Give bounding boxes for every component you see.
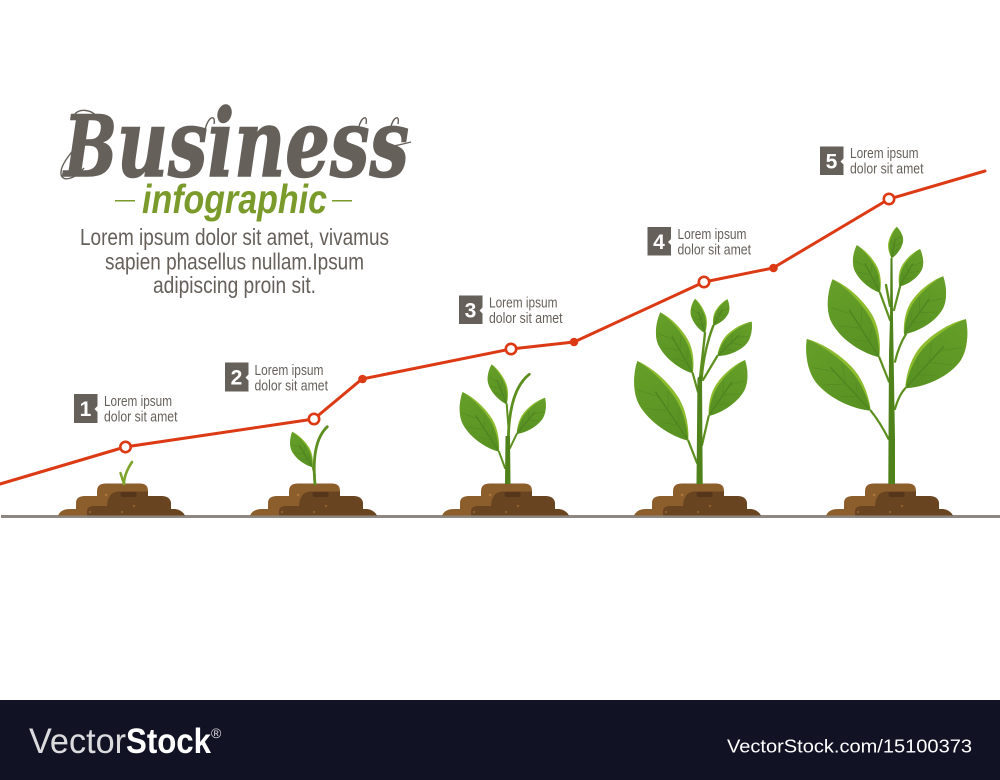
label 4: 4 bbox=[653, 231, 665, 254]
label 3: dolor sit amet bbox=[489, 311, 562, 327]
plant stage 5: mature plant bbox=[790, 226, 984, 484]
plant stage 3: young plant bbox=[448, 362, 554, 484]
plant stage 4: growing plant bbox=[619, 297, 760, 484]
label 4: Lorem ipsum bbox=[678, 227, 746, 243]
subtitle: infographic: infographic bbox=[142, 176, 327, 222]
intro paragraph bbox=[80, 224, 389, 298]
label 5: dolor sit amet bbox=[850, 162, 924, 178]
label 2: Lorem ipsum bbox=[254, 363, 324, 379]
label 4 bbox=[648, 227, 751, 258]
growth line chart bbox=[0, 171, 985, 484]
footer bar bbox=[0, 700, 1000, 780]
intro paragraph: sapien phasellus nullam.Ipsum bbox=[105, 248, 364, 274]
intro paragraph: Lorem ipsum dolor sit amet, vivamus bbox=[80, 224, 389, 250]
label 2: dolor sit amet bbox=[254, 378, 328, 394]
footer url: VectorStock.com/15100373 bbox=[727, 736, 972, 756]
intro paragraph: adipiscing proin sit. bbox=[153, 272, 316, 298]
footer logo: Vector bbox=[29, 722, 126, 761]
label 1: dolor sit amet bbox=[104, 410, 178, 426]
label 1: 1 bbox=[80, 398, 92, 421]
footer logo: Stock bbox=[126, 722, 211, 761]
label 5 bbox=[820, 146, 924, 178]
label 5: Lorem ipsum bbox=[850, 146, 918, 162]
soil mounds bbox=[58, 484, 953, 516]
label 3: Lorem ipsum bbox=[489, 296, 558, 312]
plant stage 2: seedling bbox=[284, 427, 327, 484]
title: Business: Business bbox=[63, 89, 409, 199]
label 3 bbox=[459, 296, 562, 327]
label 1 bbox=[74, 394, 178, 426]
label 1: Lorem ipsum bbox=[104, 394, 172, 410]
footer logo: ® bbox=[211, 725, 222, 741]
label 5: 5 bbox=[826, 150, 838, 174]
label 4: dolor sit amet bbox=[678, 242, 751, 258]
label 3: 3 bbox=[465, 300, 476, 322]
label 2 bbox=[225, 362, 328, 394]
plant stage 1: sprout bbox=[120, 462, 132, 484]
footer logo bbox=[29, 722, 222, 761]
label 2: 2 bbox=[231, 366, 242, 390]
ground line bbox=[1, 515, 1000, 518]
